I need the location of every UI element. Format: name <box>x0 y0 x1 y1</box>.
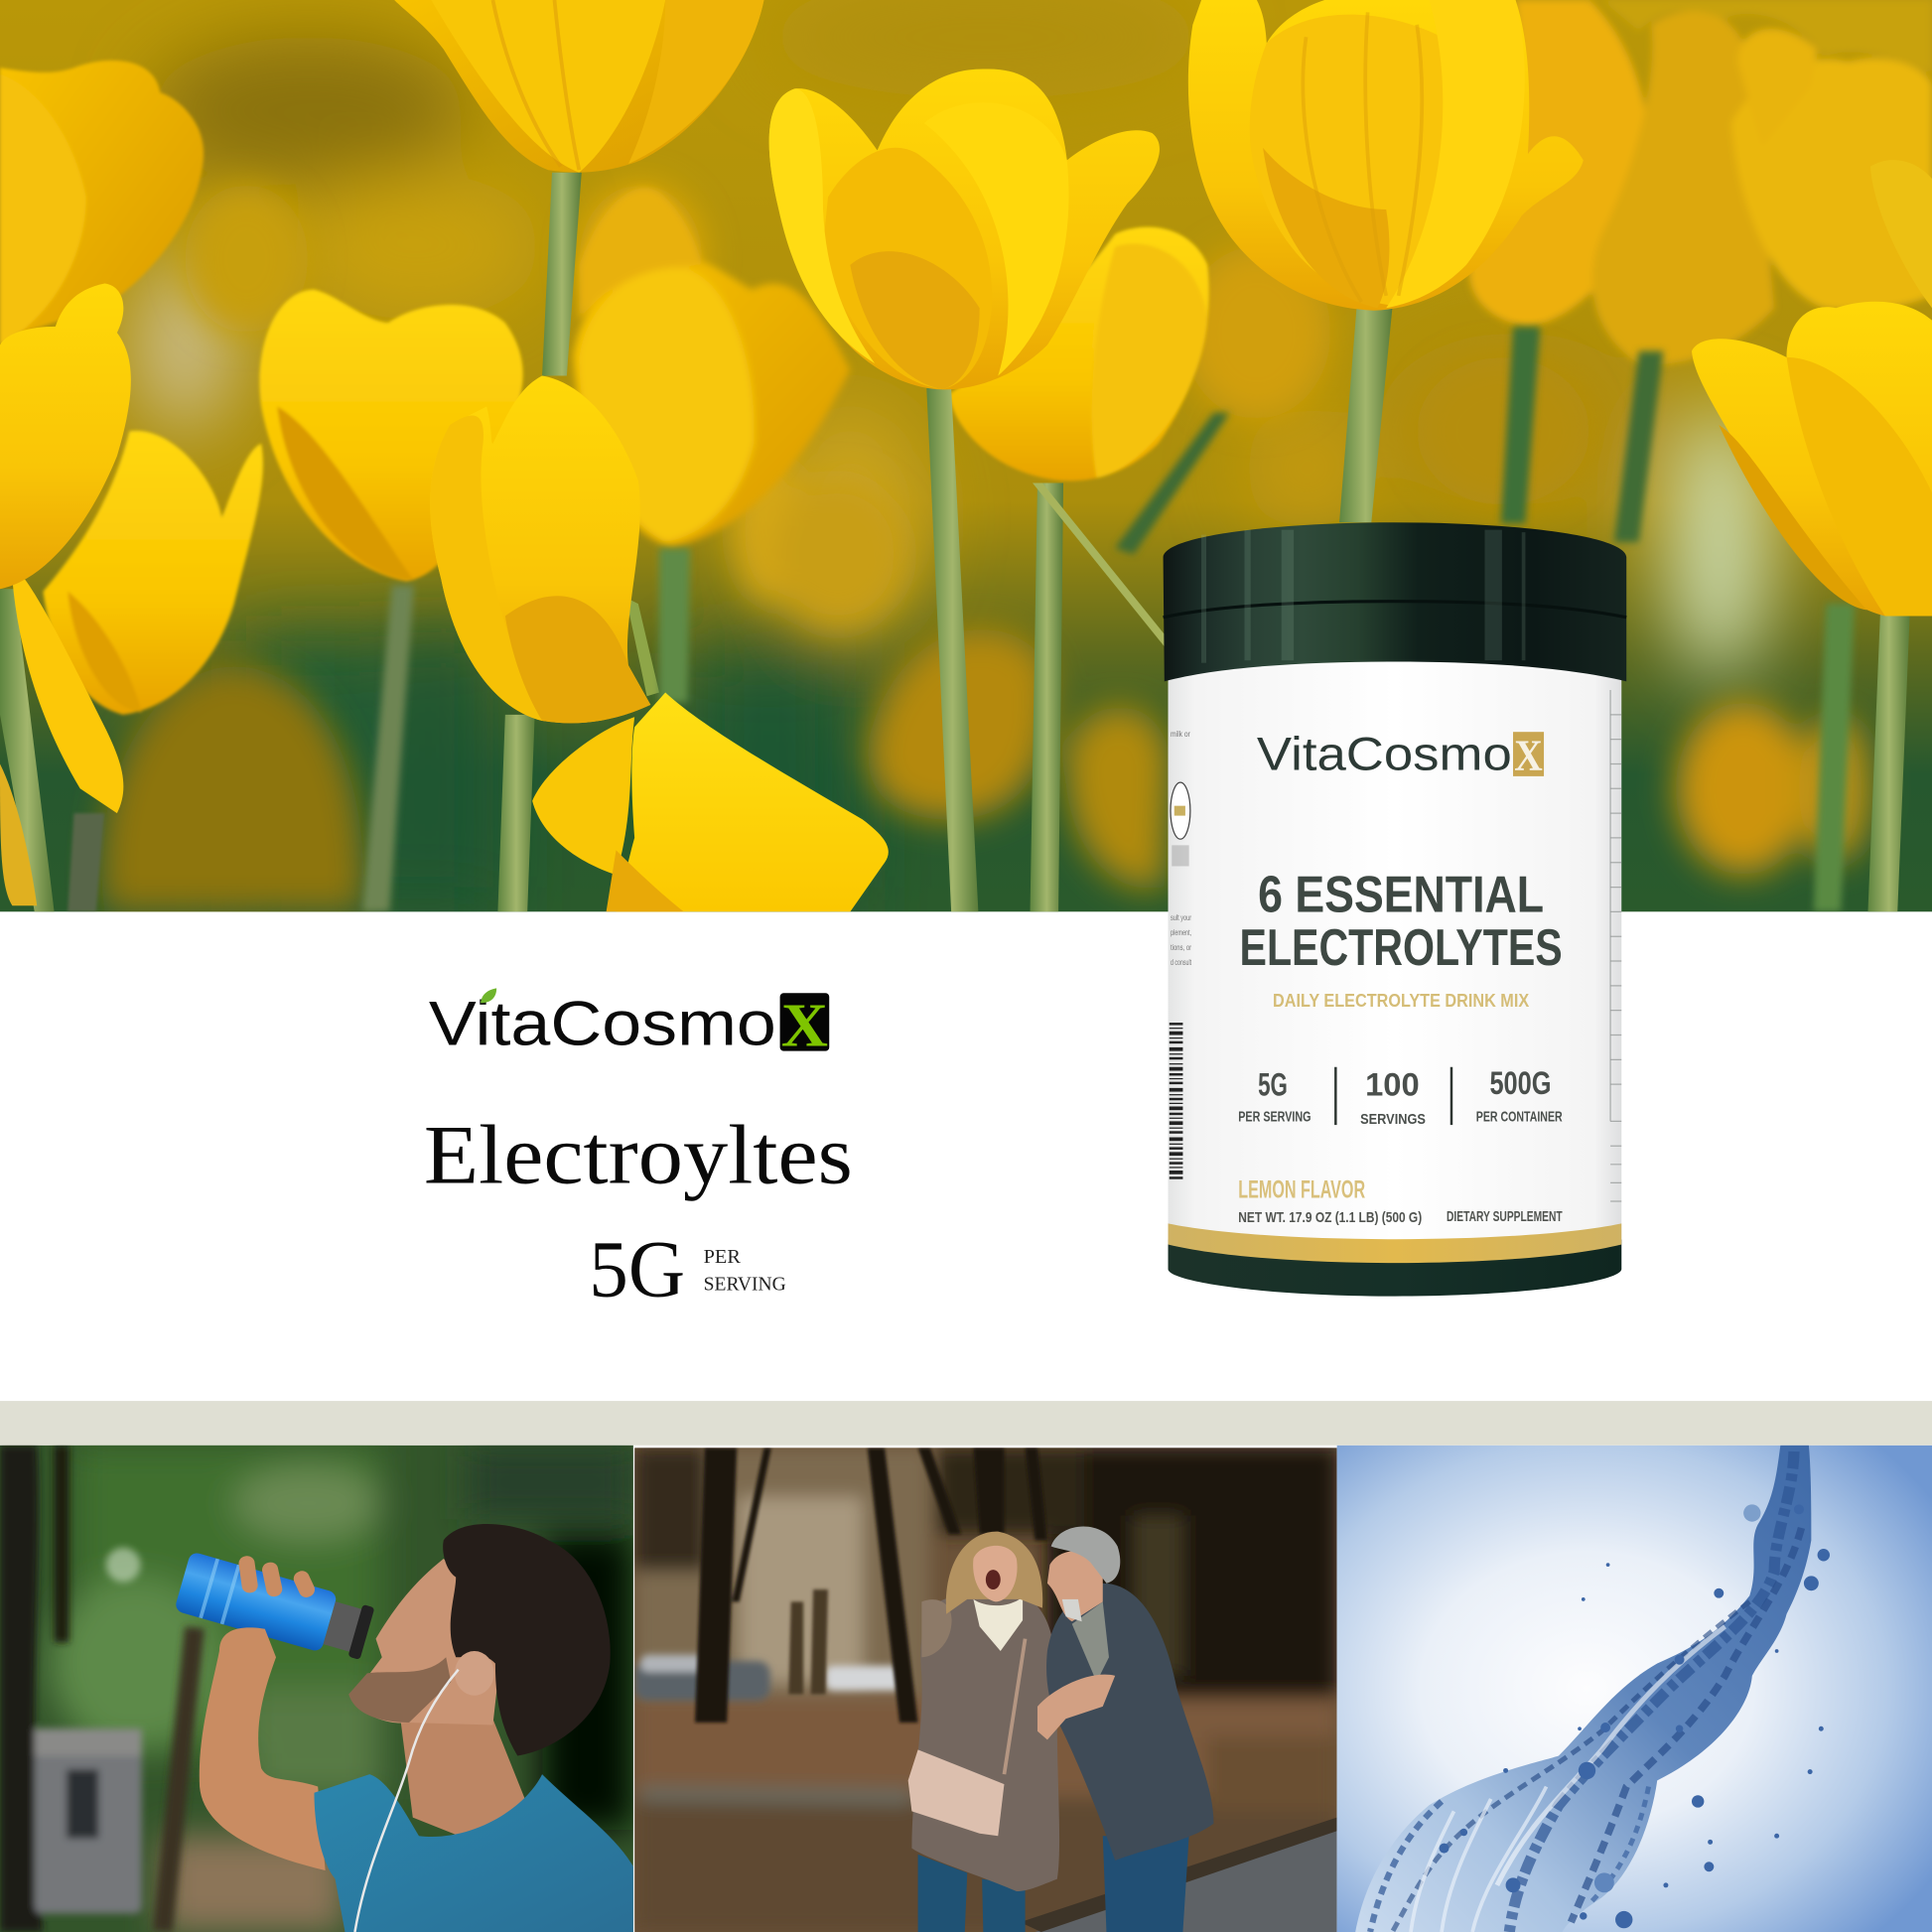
man's face <box>1047 1551 1103 1621</box>
jar lid <box>1164 522 1626 681</box>
man's ear <box>455 1651 494 1696</box>
gradient backdrop <box>1337 1446 1932 1932</box>
gold band <box>1169 1223 1621 1263</box>
serving size: 5G <box>589 1224 685 1314</box>
tulip: left foreground <box>0 283 131 905</box>
jar body <box>1169 653 1621 1297</box>
jar title <box>1240 866 1563 977</box>
woman's jeans <box>918 1855 1026 1932</box>
woman's face <box>973 1546 1018 1601</box>
serving size: PER <box>704 1246 742 1268</box>
earphone cable <box>354 1670 459 1932</box>
fallen petal lower <box>617 692 889 911</box>
product jar <box>1164 522 1626 1297</box>
jar stats: PER CONTAINER <box>1476 1109 1563 1125</box>
clasped hands <box>1037 1675 1115 1739</box>
jar title: ELECTROLYTES <box>1240 919 1563 977</box>
man's beard <box>1062 1599 1082 1621</box>
jar stats: PER SERVING <box>1238 1109 1311 1125</box>
jar side directions: d consult <box>1171 957 1191 967</box>
water splash <box>1355 1446 1830 1932</box>
man's hair <box>1051 1527 1120 1584</box>
icon: side stamp <box>1171 782 1190 866</box>
man's arm <box>200 1651 326 1870</box>
man's face <box>351 1559 505 1725</box>
jar stats <box>1238 1065 1563 1128</box>
water bottle <box>174 1551 375 1663</box>
tulip: large centre <box>769 69 1160 389</box>
jar net weight: NET WT. 17.9 OZ (1.1 LB) (500 G) <box>1238 1210 1422 1226</box>
man's coat <box>1046 1584 1213 1861</box>
jar side directions: milk or <box>1171 729 1190 739</box>
woman's scarf <box>973 1596 1023 1651</box>
jar nutrition panel edge <box>1610 690 1621 1201</box>
icon: green leaf <box>481 988 496 1003</box>
blurred meadow background <box>0 0 1932 911</box>
woman's bag <box>908 1749 1004 1836</box>
jar side directions: sult your <box>1171 912 1191 922</box>
jar logo: X <box>1514 731 1543 780</box>
hero photo: yellow tulips <box>0 0 1932 911</box>
jar side directions: plement, <box>1171 927 1191 937</box>
jar stats: SERVINGS <box>1360 1112 1426 1128</box>
band: beige divider <box>0 1401 1932 1446</box>
logo X tile: X <box>781 993 828 1060</box>
serving size <box>589 1224 786 1314</box>
jar side directions <box>1171 729 1191 967</box>
droplets <box>1440 1504 1830 1928</box>
man's hand <box>219 1555 317 1676</box>
serving size: SERVING <box>704 1273 786 1295</box>
woman's fur collar <box>921 1599 952 1657</box>
jar logo: VitaCosmo <box>1257 728 1512 780</box>
logo: VitaCosmoX: VitaCosmo <box>429 989 776 1058</box>
man <box>1037 1527 1213 1932</box>
jar title: 6 ESSENTIAL <box>1258 866 1544 923</box>
woman's coat <box>911 1594 1059 1891</box>
jar flavor: LEMON FLAVOR <box>1238 1176 1365 1203</box>
tulip: drooping centre left <box>430 376 889 911</box>
tulip: left middle <box>43 431 263 715</box>
autumn park background <box>634 1448 1337 1932</box>
photo: blue water splash <box>1337 1446 1932 1932</box>
tulip: large right <box>1188 0 1584 311</box>
tulip: far left <box>0 61 204 345</box>
tulip: top-right edge petal <box>1870 160 1932 308</box>
jar stats: 5G <box>1258 1066 1288 1102</box>
jar base <box>1169 1240 1621 1297</box>
man's shirt <box>314 1774 633 1932</box>
man's jeans <box>1103 1836 1189 1932</box>
jar subtitle: DAILY ELECTROLYTE DRINK MIX <box>1273 990 1530 1011</box>
photo: man drinking from water bottle <box>0 1446 633 1932</box>
jar side directions: tions, or <box>1171 942 1191 952</box>
man's neck <box>400 1713 530 1842</box>
heading: Electroyltes: Electroyltes <box>424 1109 853 1201</box>
park background <box>0 1446 633 1932</box>
tulip: top centre <box>394 0 763 173</box>
barcode <box>1170 1023 1182 1179</box>
fallen petal left <box>532 717 634 875</box>
rear tulips: upper right <box>1469 0 1932 364</box>
tulip: background middle <box>573 188 850 548</box>
woman's hair <box>946 1532 1042 1614</box>
jar stats: 100 <box>1365 1066 1420 1102</box>
tulip: behind jar <box>949 227 1209 481</box>
woman <box>908 1532 1059 1932</box>
photo: laughing senior couple in park <box>634 1448 1337 1932</box>
tulip: centre left <box>259 290 523 582</box>
jar supplement label: DIETARY SUPPLEMENT <box>1447 1209 1563 1225</box>
tulip stems <box>0 173 1910 911</box>
man's shirt <box>1072 1601 1109 1682</box>
man's beard <box>348 1657 451 1723</box>
tulip: far right <box>1692 302 1932 617</box>
jar stats: 500G <box>1489 1065 1552 1101</box>
park road <box>1035 1828 1337 1932</box>
parked cars <box>634 1655 901 1701</box>
man's hair <box>443 1524 611 1756</box>
